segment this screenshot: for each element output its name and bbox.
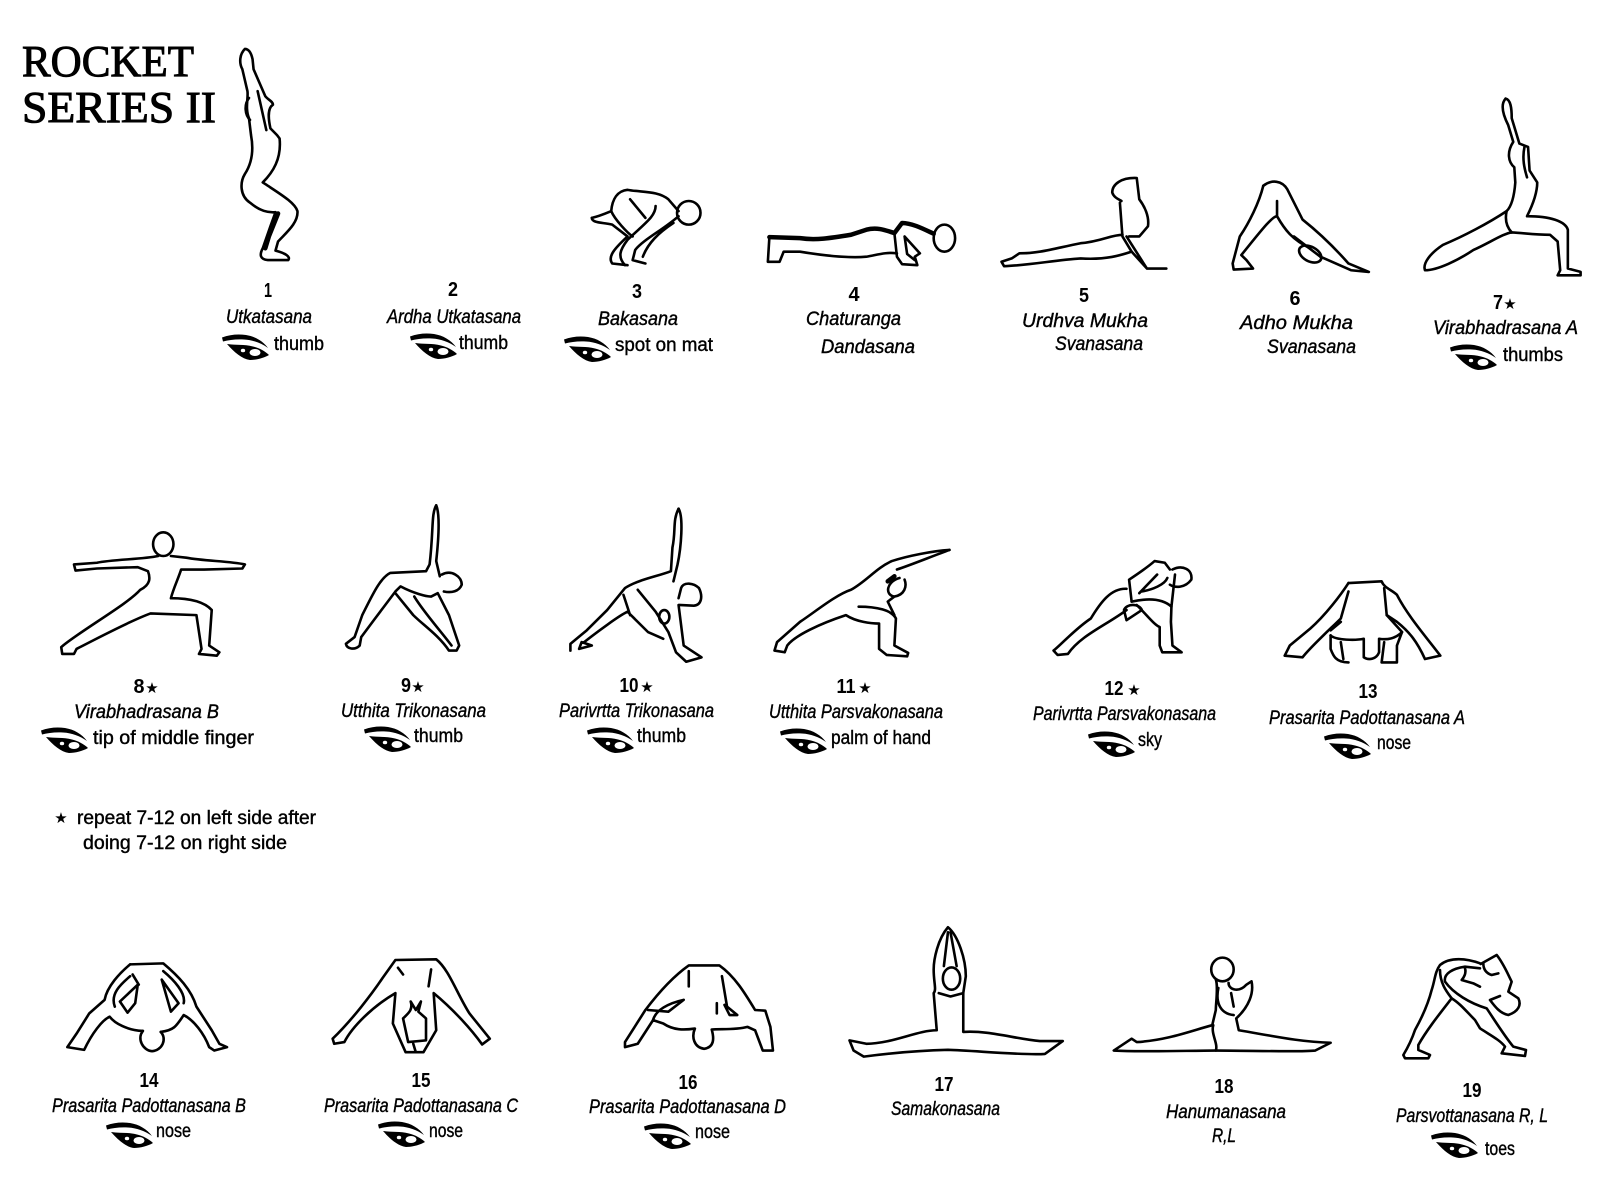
- name: [1166, 1102, 1286, 1147]
- icon: eye: [780, 729, 827, 754]
- name: Prasarita Padottanasana A: [1269, 708, 1465, 729]
- figure: Parivrtta Parsvakonasana: [1054, 561, 1191, 655]
- pose 1: Utkatasana: [222, 49, 324, 360]
- figure: Utthita Trikonasana: [346, 505, 462, 651]
- number 17: 17: [934, 1074, 954, 1096]
- footnote: ★: [54, 809, 68, 827]
- name: Svanasana: [1055, 334, 1143, 355]
- icon: eye: [106, 1123, 153, 1148]
- number 9: 9: [401, 675, 411, 697]
- figure: Bakasana: [592, 190, 701, 265]
- pose 9: Utthita Trikonasana: [341, 505, 486, 752]
- number 8: 8: [134, 676, 144, 698]
- figure: Samakonasana: [849, 927, 1063, 1057]
- number 11: 11: [836, 676, 856, 698]
- figure: Adho Mukha Svanasana: [1233, 182, 1369, 272]
- icon: eye: [644, 1124, 691, 1149]
- name: Prasarita Padottanasana C: [324, 1096, 518, 1117]
- icon: eye: [378, 1122, 425, 1147]
- number 3: 3: [632, 281, 642, 303]
- number 8: [134, 676, 159, 698]
- pose 4: Chaturanga Dandasana: [768, 223, 955, 358]
- number 4: 4: [848, 284, 860, 306]
- name: Samakonasana: [891, 1099, 1000, 1120]
- name: Chaturanga: [806, 309, 901, 330]
- icon: eye: [1088, 732, 1135, 757]
- pose 12: Parivrtta Parsvakonasana: [1033, 561, 1216, 757]
- name: Urdhva Mukha: [1022, 311, 1148, 332]
- name: [806, 309, 915, 358]
- number 19: 19: [1462, 1080, 1482, 1102]
- number 12: ★: [1127, 681, 1141, 699]
- icon: eye: [1324, 734, 1371, 759]
- pose 7: Virabhadrasana A: [1425, 99, 1581, 370]
- number 12: 12: [1104, 678, 1124, 700]
- number 18: 18: [1214, 1076, 1234, 1098]
- gaze point: spot on mat: [615, 335, 714, 356]
- pose 14: Prasarita Padottanasana B: [52, 963, 246, 1148]
- gaze point: thumb: [637, 726, 686, 747]
- name: [1239, 313, 1356, 358]
- number 13: 13: [1358, 681, 1378, 703]
- icon: eye: [222, 335, 269, 360]
- pose 17: Samakonasana: [849, 927, 1063, 1120]
- name: Virabhadrasana B: [74, 702, 219, 723]
- gaze point: nose: [156, 1121, 191, 1142]
- gaze point: nose: [695, 1122, 730, 1143]
- figure: Parivrtta Trikonasana: [570, 509, 702, 662]
- gaze point: thumbs: [1503, 345, 1563, 366]
- name: Adho Mukha: [1239, 313, 1353, 334]
- number 9: [401, 675, 425, 697]
- pose 2: Ardha Utkatasana: [386, 279, 521, 359]
- name: Utthita Trikonasana: [341, 701, 486, 722]
- icon: eye: [1450, 345, 1497, 370]
- number 10: ★: [640, 678, 654, 696]
- number 7: ★: [1503, 295, 1517, 313]
- figure: Chaturanga Dandasana: [768, 223, 955, 265]
- icon: eye: [587, 728, 634, 753]
- figure: Virabhadrasana B: [61, 532, 245, 656]
- figure: Parsvottanasana: [1403, 955, 1526, 1058]
- figure: Utkatasana: [240, 49, 298, 260]
- icon: eye: [410, 334, 457, 359]
- gaze point: toes: [1485, 1139, 1515, 1160]
- footnote: [54, 808, 317, 854]
- name: Parivrtta Trikonasana: [559, 701, 714, 722]
- name: Parivrtta Parsvakonasana: [1033, 704, 1216, 725]
- name: Dandasana: [821, 337, 915, 358]
- pose 18: Hanumanasana: [1114, 958, 1331, 1147]
- pose 3: Bakasana: [564, 190, 714, 362]
- pose 10: Parivrtta Trikonasana: [559, 509, 714, 753]
- gaze point: palm of hand: [831, 728, 931, 749]
- footnote: repeat 7-12 on left side after: [77, 808, 317, 829]
- pose 19: Parsvottanasana: [1396, 955, 1548, 1160]
- name: Utkatasana: [226, 307, 312, 328]
- number 5: 5: [1079, 285, 1089, 307]
- pose 5: Urdhva Mukha Svanasana: [1002, 178, 1166, 355]
- pose 13: Prasarita Padottanasana A: [1269, 581, 1465, 759]
- number 14: 14: [140, 1070, 159, 1092]
- figure: Prasarita Padottanasana B: [67, 963, 227, 1051]
- name: Utthita Parsvakonasana: [769, 702, 943, 723]
- gaze point: thumb: [459, 333, 508, 354]
- number 11: [836, 676, 872, 698]
- number 6: 6: [1290, 288, 1300, 310]
- number 7: [1493, 292, 1517, 314]
- name: [1022, 311, 1148, 355]
- name: Prasarita Padottanasana B: [52, 1096, 246, 1117]
- number 10: 10: [620, 675, 638, 697]
- pose 16: Prasarita Padottanasana D: [589, 965, 786, 1149]
- number 2: 2: [448, 279, 458, 301]
- figure: Hanumanasana: [1114, 958, 1331, 1051]
- footnote: doing 7-12 on right side: [83, 833, 287, 854]
- number 12: [1104, 678, 1141, 700]
- name: Prasarita Padottanasana D: [589, 1097, 786, 1118]
- figure: Urdhva Mukha Svanasana: [1002, 178, 1166, 269]
- title: SERIES II: [22, 83, 216, 132]
- icon: eye: [564, 337, 611, 362]
- name: Svanasana: [1267, 337, 1356, 358]
- number 7: 7: [1493, 292, 1503, 314]
- pose 8: Virabhadrasana B: [41, 532, 255, 753]
- icon: eye: [41, 728, 88, 753]
- gaze point: nose: [429, 1121, 463, 1142]
- name: Virabhadrasana A: [1433, 318, 1578, 339]
- name: Ardha Utkatasana: [386, 307, 521, 328]
- figure: Prasarita Padottanasana C: [333, 959, 490, 1052]
- pose 15: Prasarita Padottanasana C: [324, 959, 518, 1147]
- number 1: 1: [264, 280, 272, 302]
- icon: eye: [364, 727, 411, 752]
- icon: eye: [1431, 1133, 1478, 1158]
- figure: Virabhadrasana A: [1425, 99, 1581, 275]
- number 11: ★: [858, 679, 872, 697]
- figure: Prasarita Padottanasana A: [1285, 581, 1440, 662]
- gaze point: nose: [1377, 733, 1411, 754]
- pose 11: Utthita Parsvakonasana: [769, 550, 949, 754]
- gaze point: sky: [1138, 730, 1162, 751]
- pose 6: Adho Mukha Svanasana: [1233, 182, 1369, 358]
- gaze point: thumb: [274, 334, 324, 355]
- figure: Utthita Parsvakonasana: [774, 550, 949, 656]
- number 15: 15: [412, 1070, 430, 1092]
- figure: Prasarita Padottanasana D: [625, 965, 773, 1051]
- name: R,L: [1212, 1126, 1236, 1147]
- number 16: 16: [678, 1072, 698, 1094]
- number 10: [620, 675, 654, 697]
- gaze point: tip of middle finger: [93, 728, 255, 749]
- name: Parsvottanasana R, L: [1396, 1106, 1548, 1127]
- number 9: ★: [411, 678, 425, 696]
- title: ROCKET: [22, 37, 194, 86]
- title: [22, 37, 216, 132]
- number 8: ★: [145, 679, 159, 697]
- name: Hanumanasana: [1166, 1102, 1286, 1123]
- name: Bakasana: [598, 309, 678, 330]
- gaze point: thumb: [414, 726, 463, 747]
